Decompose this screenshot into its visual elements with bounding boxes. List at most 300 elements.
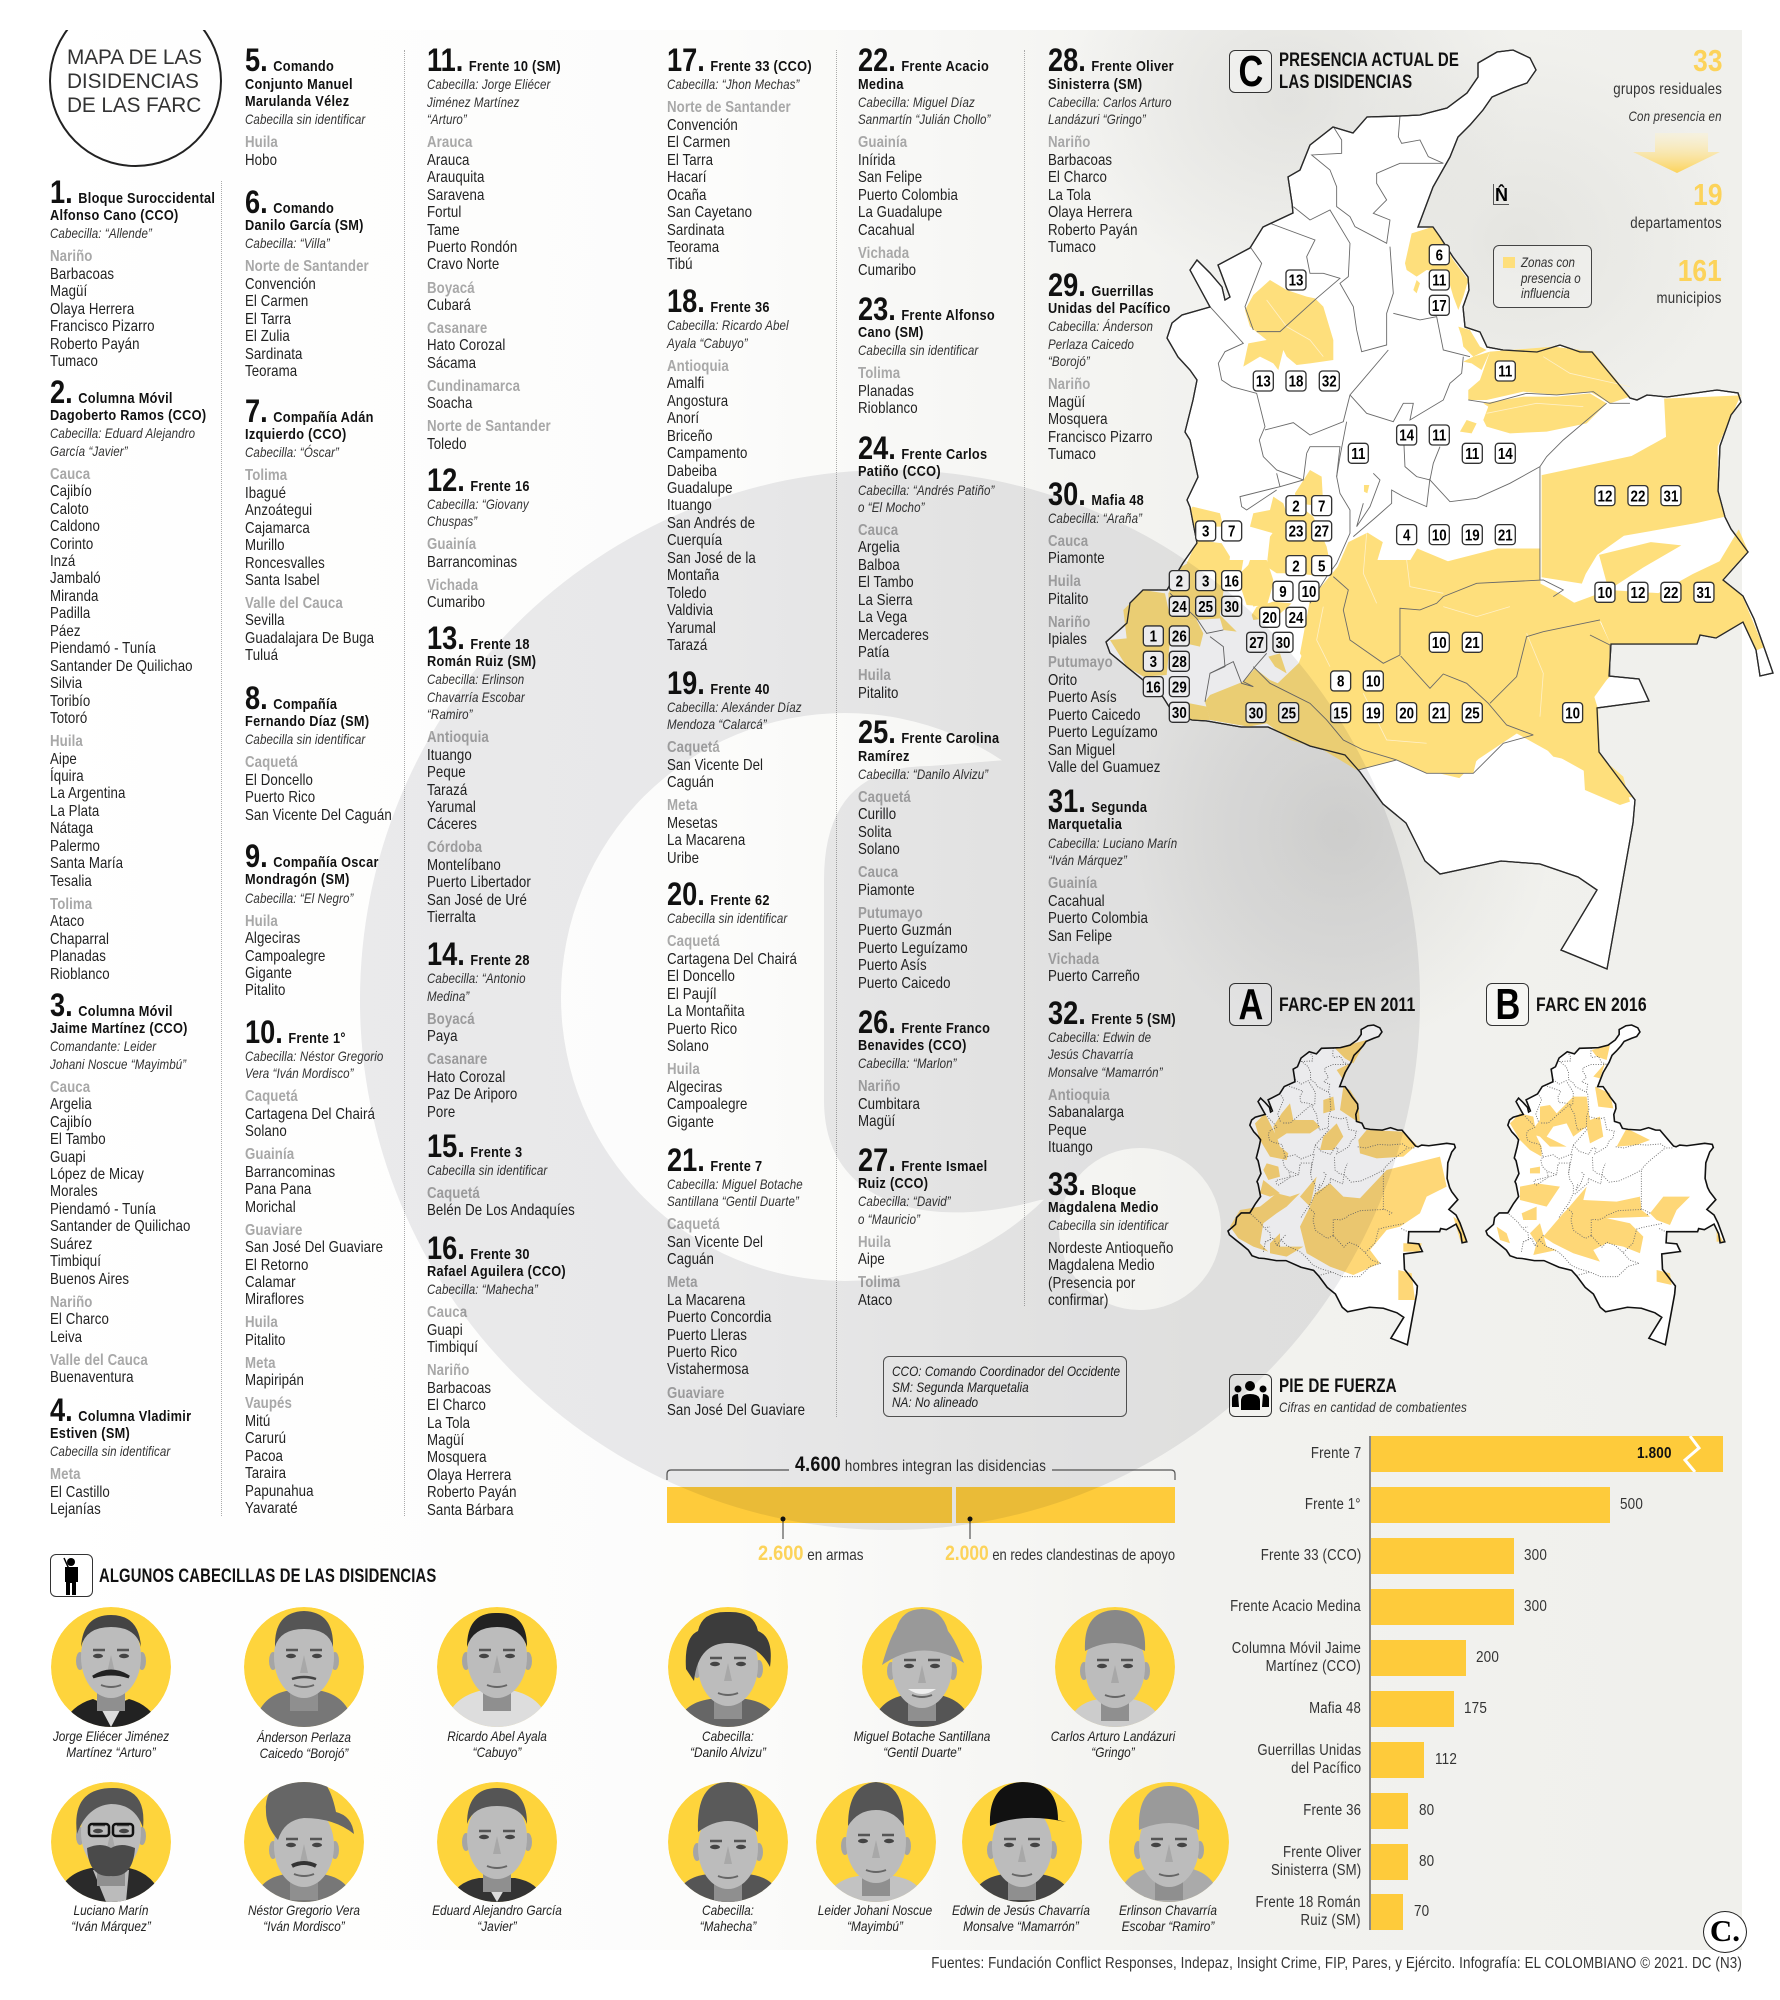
entry 11: Arauca: [427, 134, 472, 151]
entry 8: Fernando Díaz (SM): [245, 713, 369, 730]
bar chart: pie de fuerza: Frente 7: [1311, 1445, 1361, 1462]
entry 1: Francisco Pizarro: [50, 318, 155, 335]
name 5: “Gentil Duarte”: [883, 1745, 961, 1760]
entry 9: Mondragón (SM): [245, 871, 350, 888]
entry 30: [1048, 493, 1160, 776]
bar chart: pie de fuerza: Frente 18 Román: [1256, 1894, 1361, 1911]
map number labels: 11: [1498, 364, 1512, 381]
entry 11: Jiménez Martínez: [427, 95, 520, 110]
entry 26: 26. Frente Franco: [858, 1004, 990, 1040]
entry 25: Ramírez: [858, 748, 910, 765]
map number labels: 21: [1498, 527, 1513, 545]
entry 6: El Zulia: [245, 328, 290, 345]
map number labels: 10: [1366, 674, 1381, 691]
entry 2: Caloto: [50, 501, 89, 518]
entry 24: Balboa: [858, 557, 900, 574]
entry 16: Mosquera: [427, 1449, 487, 1466]
entry 1: 1. Bloque Suroccidental: [50, 174, 215, 210]
map number labels: 20: [1262, 610, 1277, 627]
entry 25: Caquetá: [858, 789, 911, 806]
sources: Fuentes: Fundación Conflict Responses, Indepaz, Insight Crime, FIP, Pares, y Ejército. Infografía: EL COLOMBIANO © 2021. DC (N3): [931, 1955, 1742, 1972]
map number labels: 21: [1432, 705, 1447, 723]
legend: influencia: [1521, 286, 1570, 301]
entry 24: La Sierra: [858, 592, 913, 609]
legend: Zonas con: [1521, 255, 1575, 270]
entry 10: Mitú: [245, 1413, 270, 1430]
entry 10: Pana Pana: [245, 1181, 311, 1198]
map number labels: 18: [1289, 374, 1303, 391]
entry 3: Jaime Martínez (CCO): [50, 1020, 188, 1037]
name 6: “Gringo”: [1091, 1745, 1135, 1760]
entry 9: [245, 838, 379, 999]
entry 2: Padilla: [50, 605, 90, 622]
stat: 161: 161: [1678, 253, 1722, 288]
entry 13: Ituango: [427, 747, 472, 764]
map number labels: 1: [1150, 629, 1157, 646]
name 11: [801, 1903, 949, 1935]
icon: armed man: [64, 1558, 78, 1595]
map number labels: 12: [1631, 585, 1645, 602]
entry 3: Buenos Aires: [50, 1271, 129, 1288]
entry 1: Olaya Herrera: [50, 301, 134, 318]
entry 8: El Doncello: [245, 772, 313, 789]
entry 13: Cáceres: [427, 816, 477, 833]
yellow zones, Catatumbo: [1405, 227, 1468, 310]
entry 21: Vistahermosa: [667, 1361, 749, 1378]
entry 22: La Guadalupe: [858, 204, 942, 221]
entry 14: Pore: [427, 1104, 455, 1121]
map number labels: 3: [1202, 524, 1209, 541]
entry 24: Patiño (CCO): [858, 463, 941, 480]
entry 18: Anorí: [667, 410, 699, 427]
entry 13: Yarumal: [427, 799, 476, 816]
entry 19: Mesetas: [667, 815, 718, 832]
entry 8: Caquetá: [245, 754, 298, 771]
entry 24: Pitalito: [858, 685, 898, 702]
map number labels: 10: [1432, 635, 1447, 652]
entry 27: Ataco: [858, 1292, 892, 1309]
entry 27: [858, 1159, 987, 1309]
icon box pie de fuerza: [1229, 1374, 1272, 1417]
entry 10: Vera “Iván Mordisco”: [245, 1066, 354, 1081]
entry 15: [427, 1145, 575, 1220]
map number labels: 6: [1436, 247, 1443, 265]
entry 30: Nariño: [1048, 614, 1090, 631]
entry 21: [667, 1159, 805, 1419]
name 8: [230, 1903, 378, 1935]
bar: 2.600 en armas: [667, 1487, 952, 1523]
total heading: 4.600 hombres integran las disidencias: [795, 1453, 1046, 1476]
entry 3: Cajibío: [50, 1114, 92, 1131]
map A box: A: [1238, 980, 1263, 1029]
bracket 4.600: [667, 1470, 1175, 1480]
entry 27: Aipe: [858, 1251, 885, 1268]
title: mapa de las disidencias: MAPA DE LAS: [67, 46, 202, 69]
entry 2: Piendamó - Tunía: [50, 640, 156, 657]
map number labels: 19: [1366, 705, 1381, 723]
entry 6: Convención: [245, 276, 316, 293]
name 9: Eduard Alejandro García: [432, 1903, 562, 1918]
entry 11: Cundinamarca: [427, 378, 520, 395]
portrait: Mamarrón: [962, 1782, 1082, 1902]
portrait: Ricardo Abel Ayala: [437, 1607, 557, 1727]
entry 3: Leiva: [50, 1329, 82, 1346]
entry 19: Meta: [667, 797, 698, 814]
map number labels: 16: [1146, 679, 1161, 697]
entry 1: Roberto Payán: [50, 336, 140, 353]
entry 4: El Castillo: [50, 1484, 110, 1501]
entry 29: 29. Guerrillas: [1048, 266, 1154, 302]
entry 7: [245, 392, 374, 664]
name 2: [230, 1730, 378, 1762]
entry 31: Cabecilla: Luciano Marín: [1048, 836, 1177, 851]
name 10: “Mahecha”: [700, 1919, 756, 1934]
map number labels: 11: [1351, 446, 1365, 463]
entry 22: [858, 60, 990, 280]
entry 30: Puerto Caicedo: [1048, 707, 1141, 724]
entry 13: Montelíbano: [427, 857, 501, 874]
map number labels: 17: [1432, 298, 1447, 315]
map number labels: 5: [1318, 558, 1325, 576]
map number labels: 30: [1224, 599, 1239, 616]
bar chart: pie de fuerza: 80: [1419, 1802, 1434, 1819]
entry 25: Curillo: [858, 806, 896, 823]
entry 10: Mapiripán: [245, 1372, 304, 1389]
entry 18: Toledo: [667, 585, 707, 602]
entry 3: Buenaventura: [50, 1369, 134, 1386]
portrait: Mahecha: [668, 1782, 788, 1902]
entry 3: Valle del Cauca: [50, 1352, 148, 1369]
name 4: “Danilo Alvizu”: [690, 1745, 766, 1760]
entry 33: Magdalena Medio: [1048, 1199, 1159, 1216]
entry 11: Saravena: [427, 187, 484, 204]
entry 13: Tarazá: [427, 782, 467, 799]
entry 10: Miraflores: [245, 1291, 304, 1308]
entry 5: Cabecilla sin identificar: [245, 112, 365, 127]
stat label: departamentos: departamentos: [1630, 215, 1722, 232]
entry 13: Tierralta: [427, 909, 476, 926]
entry 10: Vaupés: [245, 1395, 292, 1412]
entry 5: Marulanda Vélez: [245, 93, 349, 110]
entry 24: La Vega: [858, 609, 907, 626]
entry 21: Meta: [667, 1274, 698, 1291]
name 12: Edwin de Jesús Chavarría: [952, 1903, 1090, 1918]
entry 18: Amalfi: [667, 375, 704, 392]
entry 31: Cacahual: [1048, 893, 1105, 910]
entry 17: Convención: [667, 117, 738, 134]
entry 33: Cabecilla sin identificar: [1048, 1218, 1168, 1233]
entry 28: [1048, 60, 1174, 256]
entry 11: Arauca: [427, 152, 470, 169]
bar chart: pie de fuerza: 112: [1435, 1751, 1457, 1768]
entry 13: “Ramiro”: [427, 707, 473, 722]
name 11: Leider Johani Noscue: [818, 1903, 932, 1918]
map number labels: 25: [1465, 705, 1480, 723]
entry 2: Huila: [50, 733, 83, 750]
entry 30: Huila: [1048, 573, 1081, 590]
entry 7: Guadalajara De Buga: [245, 630, 374, 647]
entry 11: Fortul: [427, 204, 461, 221]
name 13: Erlinson Chavarría: [1119, 1903, 1217, 1918]
entry 18: [667, 301, 789, 655]
entry 16: Nariño: [427, 1362, 470, 1379]
entry 18: San Andrés de: [667, 515, 755, 532]
map number labels: 32: [1322, 374, 1337, 391]
entry 30: Orito: [1048, 672, 1077, 689]
entry 30: San Miguel: [1048, 742, 1115, 759]
entry 6: Sardinata: [245, 346, 303, 363]
entry 9: Pitalito: [245, 982, 285, 999]
entry 21: Caguán: [667, 1251, 714, 1268]
map number labels: 2: [1292, 498, 1300, 516]
entry 29: [1048, 284, 1171, 463]
yellow zones map A: [1230, 1040, 1467, 1300]
entry 32: [1048, 1012, 1176, 1157]
entry 2: Chaparral: [50, 931, 109, 948]
entry 7: Tolima: [245, 467, 287, 484]
map number labels: 10: [1302, 584, 1316, 601]
entry 17: El Tarra: [667, 152, 713, 169]
entry 18: 18. Frente 36: [667, 283, 770, 319]
entry 4: Cabecilla sin identificar: [50, 1444, 170, 1459]
entry 3: [50, 986, 190, 1386]
map heading C box: [1229, 50, 1272, 93]
name 12: [947, 1903, 1095, 1935]
map number labels: 24: [1289, 610, 1303, 627]
portrait: Ánderson Perlaza: [244, 1607, 364, 1727]
portrait: Luciano Marín: [51, 1782, 171, 1902]
entry 7: Ibagué: [245, 485, 286, 502]
bar chart: pie de fuerza: Frente Oliver: [1283, 1844, 1361, 1861]
entry 18: Valdivia: [667, 602, 713, 619]
entry 10: Morichal: [245, 1199, 296, 1216]
entry 15: Caquetá: [427, 1185, 480, 1202]
entry 18: Guadalupe: [667, 480, 733, 497]
entry 18: Briceño: [667, 428, 713, 445]
entry 18: Dabeiba: [667, 463, 717, 480]
stat label: municipios: municipios: [1657, 290, 1722, 307]
icon: group: [1232, 1381, 1269, 1410]
entry 18: Ituango: [667, 497, 712, 514]
entry 19: Mendoza “Calarcá”: [667, 717, 767, 732]
entry 10: Calamar: [245, 1274, 296, 1291]
entry 25: Puerto Caicedo: [858, 975, 951, 992]
entry 13: Peque: [427, 764, 466, 781]
entry 31: 31. Segunda: [1048, 783, 1147, 819]
entry 16: Olaya Herrera: [427, 1467, 511, 1484]
map number labels: 22: [1631, 488, 1645, 506]
stat note: Con presencia en: [1629, 109, 1722, 124]
map A heading: FARC-EP EN 2011: [1279, 994, 1415, 1016]
name 3: “Cabuyo”: [473, 1745, 521, 1760]
entry 9: Huila: [245, 913, 278, 930]
entry 25: Piamonte: [858, 882, 915, 899]
portrait: Carlos Arturo Landázuri: [1055, 1607, 1175, 1727]
entry 17: Cabecilla: “Jhon Mechas”: [667, 77, 799, 92]
heading cabecillas box: [50, 1554, 93, 1597]
entry 2: Santander De Quilichao: [50, 658, 193, 675]
entry 3: López de Micay: [50, 1166, 144, 1183]
entry 3: Timbiquí: [50, 1253, 101, 1270]
entry 7: Sevilla: [245, 612, 285, 629]
entry 13: Antioquia: [427, 729, 489, 746]
entry 22: Medina: [858, 76, 904, 93]
entry 1: Cabecilla: “Allende”: [50, 226, 152, 241]
entry 1: Magüí: [50, 283, 87, 300]
entry 13: 13. Frente 18: [427, 620, 530, 656]
entry 30: Ipiales: [1048, 631, 1087, 648]
entry 14: Cabecilla: “Antonio: [427, 971, 526, 986]
entry 16: Rafael Aguilera (CCO): [427, 1263, 566, 1280]
yellow presence zones, north: [1187, 280, 1630, 607]
entry 30: Cabecilla: “Araña”: [1048, 511, 1142, 526]
portrait: Néstor Gregorio Vera: [244, 1782, 364, 1902]
map B box: [1486, 983, 1529, 1026]
entry 1: Tumaco: [50, 353, 98, 370]
map number labels: 25: [1281, 705, 1296, 723]
entry 7: Cabecilla: “Óscar”: [245, 445, 339, 460]
bar chart: pie de fuerza: 80: [1419, 1853, 1434, 1870]
portrait: Mayimbú: [816, 1782, 936, 1902]
map number labels: 20: [1399, 705, 1414, 723]
entry 24: Cabecilla: “Andrés Patiño”: [858, 482, 994, 498]
entry 15: 15. Frente 3: [427, 1128, 522, 1164]
entry 17: Teorama: [667, 239, 719, 256]
entry 32: Jesús Chavarría: [1048, 1047, 1133, 1062]
entry 29: Mosquera: [1048, 411, 1108, 428]
entry 14: Paya: [427, 1028, 458, 1045]
entry 16: La Tola: [427, 1415, 470, 1432]
entry 4: 4. Columna Vladimir: [50, 1392, 191, 1428]
entry 13: Chavarría Escobar: [427, 690, 525, 705]
bar chart: pie de fuerza: Sinisterra (SM): [1271, 1862, 1361, 1878]
entry 18: Cuerquía: [667, 532, 722, 549]
abbreviations box: CCO: Comando Coordinador del Occidente: [892, 1364, 1120, 1379]
map B heading: FARC EN 2016: [1536, 994, 1647, 1016]
entry 20: 20. Frente 62: [667, 876, 770, 912]
entry 4: Meta: [50, 1466, 81, 1483]
entry 16: Santa Bárbara: [427, 1502, 514, 1519]
map number labels: 8: [1337, 674, 1344, 691]
entry 16: Roberto Payán: [427, 1484, 517, 1501]
entry 1: [50, 174, 215, 370]
entry 32: Peque: [1048, 1122, 1087, 1139]
name 2: Caicedo “Borojó”: [260, 1746, 348, 1761]
entry 22: Puerto Colombia: [858, 187, 958, 204]
entry 23: Planadas: [858, 383, 914, 400]
entry 12: Vichada: [427, 577, 478, 594]
bar chart: pie de fuerza: Frente 1°: [1305, 1496, 1361, 1513]
map A: FARC-EP 2011: [1228, 1025, 1467, 1345]
entry 16: Cabecilla: “Mahecha”: [427, 1282, 538, 1297]
entry 20: Huila: [667, 1061, 700, 1078]
entry 7: Cajamarca: [245, 520, 310, 537]
name 3: [423, 1729, 571, 1761]
map number labels: 11: [1432, 428, 1446, 445]
entry 22: San Felipe: [858, 169, 922, 186]
entry 11: Cravo Norte: [427, 256, 499, 273]
map C: presencia actual: [1106, 50, 1773, 969]
entry 11: Cubará: [427, 297, 471, 314]
entry 28: Barbacoas: [1048, 152, 1112, 169]
bar chart: pie de fuerza: Frente Acacio Medina: [1230, 1598, 1361, 1615]
bar chart: pie de fuerza: Ruiz (SM): [1301, 1912, 1361, 1928]
entry 22: Inírida: [858, 152, 895, 169]
entry 2: Tesalia: [50, 873, 92, 890]
entry 32: Ituango: [1048, 1139, 1093, 1156]
divider column 1: [221, 181, 222, 1516]
entry 7: Santa Isabel: [245, 572, 320, 589]
entry 10: Barrancominas: [245, 1164, 335, 1181]
entry 29: Perlaza Caicedo: [1048, 337, 1134, 352]
entry 28: 28. Frente Oliver: [1048, 42, 1174, 78]
entry 21: Caquetá: [667, 1216, 720, 1233]
name 8: “Iván Mordisco”: [263, 1919, 345, 1934]
entry 2: Cauca: [50, 466, 90, 483]
name 13: Escobar “Ramiro”: [1122, 1919, 1214, 1934]
entry 22: Cumaribo: [858, 262, 916, 279]
entry 17: El Carmen: [667, 134, 730, 151]
entry 25: Puerto Guzmán: [858, 922, 952, 939]
entry 11: Arauquita: [427, 169, 485, 186]
name 8: Néstor Gregorio Vera: [248, 1903, 360, 1918]
stat: 19: 19: [1693, 177, 1722, 212]
entry 25: Cauca: [858, 864, 898, 881]
entry 2: La Argentina: [50, 785, 125, 802]
name 2: Ánderson Perlaza: [257, 1730, 351, 1745]
map number labels: 22: [1664, 585, 1678, 602]
entry 22: Cabecilla: Miguel Díaz: [858, 95, 975, 110]
bar chart: pie de fuerza: Guerrillas Unidas: [1257, 1742, 1361, 1759]
entry 17: [667, 60, 812, 274]
map number labels: 14: [1399, 428, 1414, 445]
entry 32: Sabanalarga: [1048, 1104, 1124, 1121]
entry 31: Marquetalia: [1048, 816, 1122, 833]
entry 8: Cabecilla sin identificar: [245, 732, 365, 747]
entry 18: Montaña: [667, 567, 719, 584]
bar chart: pie de fuerza: Frente 36: [1303, 1802, 1361, 1819]
entry 27: Huila: [858, 1234, 891, 1251]
entry 14: Paz De Ariporo: [427, 1086, 517, 1103]
entry 28: La Tola: [1048, 187, 1091, 204]
entry 29: “Borojó”: [1048, 354, 1090, 369]
label 2.600: 2.600 en armas: [758, 1542, 863, 1565]
yellow zones, southwest: [1110, 560, 1630, 805]
entry 26: Cabecilla: “Marlon”: [858, 1056, 957, 1071]
entry 2: Íquira: [50, 768, 84, 785]
entry 22: Sanmartín “Julián Chollo”: [858, 112, 990, 127]
entry 28: Roberto Payán: [1048, 222, 1138, 239]
entry 10: Yavaraté: [245, 1500, 298, 1517]
name 9: “Javier”: [477, 1919, 517, 1934]
entry 30: Cauca: [1048, 533, 1088, 550]
entry 2: Totoró: [50, 710, 87, 727]
abbreviations box: [883, 1356, 1127, 1417]
divider column 4: [836, 50, 837, 1417]
entry 10: Huila: [245, 1314, 278, 1331]
entry 29: Cabecilla: Ánderson: [1048, 319, 1153, 334]
map number labels: 11: [1465, 446, 1479, 463]
entry 29: Nariño: [1048, 376, 1090, 393]
name 6: Carlos Arturo Landázuri: [1051, 1729, 1175, 1744]
entry 3: 3. Columna Móvil: [50, 986, 173, 1022]
title: mapa de las disidencias: DISIDENCIAS: [67, 70, 199, 93]
entry 11: Cabecilla: Jorge Eliécer: [427, 77, 550, 92]
entry 20: Algeciras: [667, 1079, 722, 1096]
name 3: Ricardo Abel Ayala: [447, 1729, 547, 1744]
entry 18: Angostura: [667, 393, 728, 410]
entry 19: Cabecilla: Alexánder Díaz: [667, 700, 802, 715]
